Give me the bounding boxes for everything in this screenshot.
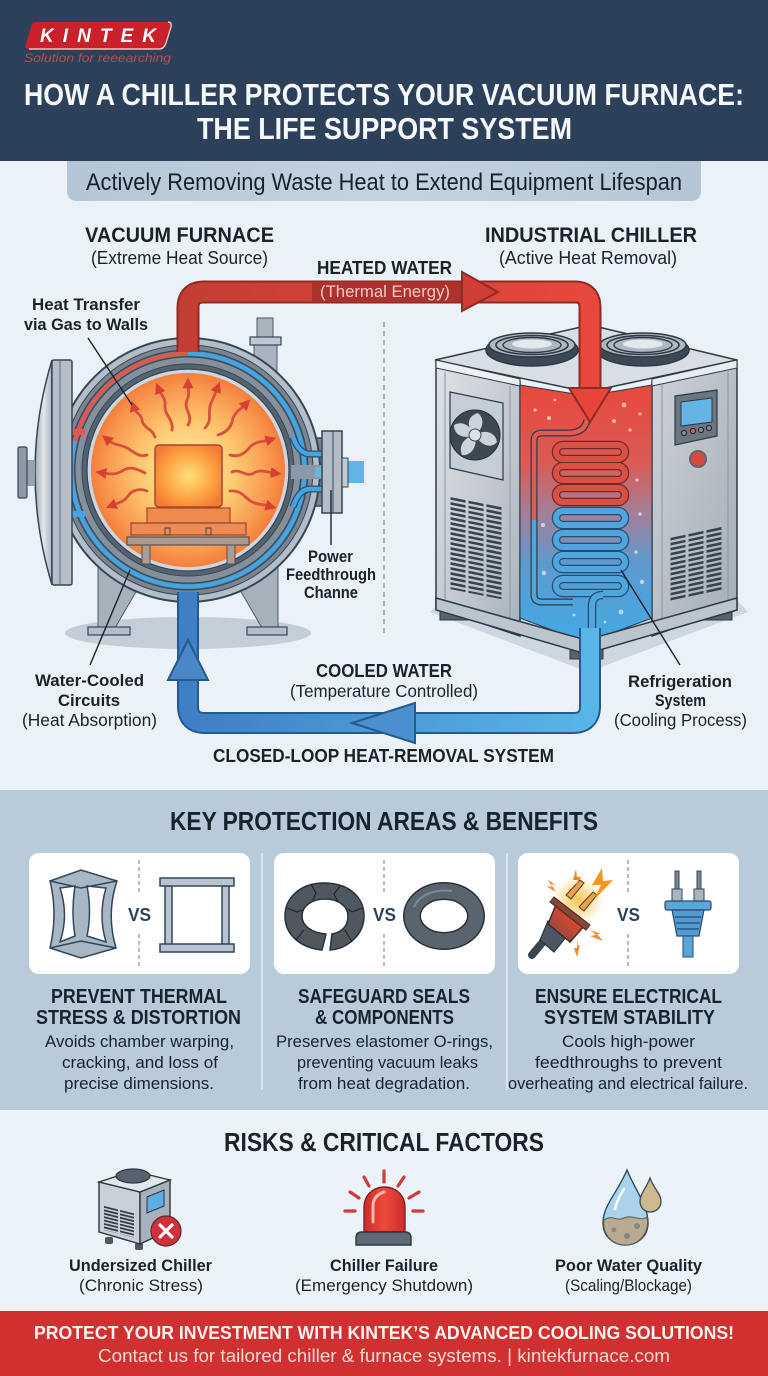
card text: thermal stress: cracking, and loss of bbox=[62, 1053, 218, 1072]
callout: water-cooled circuits: (Heat Absorption) bbox=[22, 710, 157, 730]
icon: burnt plug bbox=[532, 868, 613, 957]
risk: poor water quality bbox=[555, 1170, 703, 1295]
door flange bbox=[52, 360, 72, 585]
risk: undersized chiller: (Chronic Stress) bbox=[79, 1276, 203, 1295]
risk: chiller failure: (Emergency Shutdown) bbox=[295, 1276, 473, 1295]
center dashed divider bbox=[383, 322, 385, 637]
callout: heat transfer: via Gas to Walls bbox=[24, 315, 148, 334]
thermal energy label: (Thermal Energy) bbox=[320, 282, 450, 301]
furnace floor shadow bbox=[65, 617, 311, 649]
risks heading: RISKS & CRITICAL FACTORS bbox=[224, 1129, 544, 1157]
cooled water label: (Temperature Controlled) bbox=[290, 681, 478, 701]
risk: chiller failure bbox=[295, 1171, 473, 1295]
callout: power feedthrough: Power bbox=[308, 547, 353, 566]
card text: seals: from heat degradation. bbox=[298, 1074, 470, 1093]
icon: small chiller with X bbox=[99, 1169, 181, 1250]
door bbox=[18, 360, 52, 585]
icon: healthy plug bbox=[665, 871, 711, 957]
card text: electrical: Cools high-power bbox=[562, 1032, 695, 1051]
right port channels and flange bbox=[291, 431, 364, 513]
footer call to action: PROTECT YOUR INVESTMENT WITH KINTEK’S ADVANCED COOLING SOLUTIONS! bbox=[34, 1322, 734, 1343]
pipe from furnace to chiller bbox=[188, 292, 590, 390]
arrowhead into chiller bbox=[569, 388, 611, 422]
card text: thermal stress: Avoids chamber warping, bbox=[45, 1032, 234, 1051]
callout: water-cooled circuits: Water-Cooled bbox=[35, 671, 144, 690]
cooled water label bbox=[290, 661, 478, 701]
cooled water label: COOLED WATER bbox=[316, 661, 452, 681]
callout: refrigeration system: Refrigeration bbox=[628, 672, 732, 691]
callout: refrigeration system bbox=[614, 570, 747, 730]
icon: cabinet fan bbox=[450, 392, 503, 480]
chiller heading: INDUSTRIAL CHILLER bbox=[485, 223, 697, 247]
loop: cooled water pipe and arrows bbox=[168, 592, 590, 743]
chiller feet bbox=[440, 606, 732, 659]
left cabinet panel bbox=[436, 360, 520, 636]
right cabinet panel bbox=[652, 360, 737, 636]
risk: poor water quality: (Scaling/Blockage) bbox=[565, 1276, 692, 1295]
title bbox=[24, 78, 744, 146]
logo: KINTEK: Solution for reeearching bbox=[24, 53, 172, 65]
card text: thermal stress: STRESS & DISTORTION bbox=[36, 1007, 241, 1029]
heated load and stand bbox=[127, 445, 249, 564]
icon: cracked o-ring bbox=[285, 883, 364, 950]
chiller floor shadow bbox=[430, 598, 748, 672]
card text: thermal stress: precise dimensions. bbox=[64, 1074, 214, 1093]
logo: KINTEK: KINTEK bbox=[40, 26, 157, 47]
arrowhead up into furnace bbox=[168, 640, 208, 680]
card: thermal stress bbox=[29, 853, 250, 974]
right side nozzle body bbox=[285, 400, 326, 540]
chiller heading bbox=[485, 223, 697, 268]
label: chiller failure: Chiller Failure bbox=[330, 1256, 438, 1275]
subtitle banner bbox=[67, 161, 701, 201]
panel: risks and critical factors bbox=[0, 1110, 768, 1311]
card text: thermal stress: PREVENT THERMAL bbox=[51, 986, 227, 1008]
loop: heated water pipe and arrows bbox=[188, 258, 611, 422]
label: undersized chiller: Undersized Chiller bbox=[69, 1256, 212, 1275]
callout: power feedthrough: Feedthrough bbox=[286, 565, 376, 584]
callout: water-cooled circuits: Circuits bbox=[58, 691, 120, 710]
card text: seals: & COMPONENTS bbox=[315, 1007, 454, 1029]
heat waves bbox=[103, 385, 274, 506]
callout: heat transfer: Heat Transfer bbox=[32, 295, 140, 314]
refrigeration coil bbox=[534, 420, 625, 640]
control display bbox=[675, 390, 717, 467]
vacuum furnace illustration bbox=[18, 318, 364, 649]
callout: power feedthrough: Channe bbox=[304, 583, 358, 602]
card text: electrical: ENSURE ELECTRICAL bbox=[535, 986, 722, 1008]
risk: undersized chiller bbox=[69, 1169, 212, 1295]
card text: thermal stress bbox=[36, 986, 241, 1093]
header banner bbox=[0, 0, 768, 161]
icon: warped frame bbox=[50, 870, 117, 958]
icon: alarm siren bbox=[345, 1171, 423, 1245]
card text: seals: SAFEGUARD SEALS bbox=[298, 986, 470, 1008]
card text: electrical: overheating and electrical failure. bbox=[508, 1074, 748, 1093]
heated water label: HEATED WATER bbox=[317, 258, 452, 278]
card: thermal stress: VS bbox=[128, 905, 151, 925]
chiller heading: (Active Heat Removal) bbox=[499, 248, 677, 268]
label: poor water quality: Poor Water Quality bbox=[555, 1256, 703, 1275]
callout: power feedthrough bbox=[286, 490, 376, 602]
closed-loop caption: CLOSED-LOOP HEAT-REMOVAL SYSTEM bbox=[213, 746, 554, 766]
furnace heading: (Extreme Heat Source) bbox=[91, 248, 268, 268]
card text: seals: Preserves elastomer O-rings, bbox=[276, 1032, 493, 1051]
icon: intact o-ring bbox=[412, 891, 476, 941]
footer call to action bbox=[0, 1311, 768, 1376]
callout: refrigeration system: System bbox=[655, 691, 706, 710]
coolant bubbles bbox=[533, 399, 644, 623]
arrowhead left along pipe bbox=[352, 703, 415, 743]
card: seals: VS bbox=[373, 905, 396, 925]
left louvers bbox=[458, 499, 494, 598]
arrowhead into horizontal run bbox=[462, 272, 498, 311]
card text: electrical: feedthroughs to prevent bbox=[535, 1053, 722, 1072]
glowing hot zone bbox=[91, 373, 285, 567]
furnace legs bbox=[88, 560, 287, 635]
card: electrical: VS bbox=[617, 905, 640, 925]
title: THE LIFE SUPPORT SYSTEM bbox=[197, 112, 572, 146]
logo: KINTEK bbox=[24, 22, 172, 65]
chiller base frame bbox=[436, 598, 737, 654]
industrial chiller illustration bbox=[430, 325, 748, 672]
card text: electrical bbox=[508, 986, 748, 1093]
furnace heading: VACUUM FURNACE bbox=[85, 223, 274, 247]
open refrigeration compartment bbox=[520, 385, 652, 643]
icon: contaminated water drops bbox=[603, 1170, 661, 1245]
top surface and fans bbox=[435, 325, 737, 392]
panel: key protection areas bbox=[0, 790, 768, 1110]
card: electrical bbox=[518, 853, 739, 974]
card: seals bbox=[274, 853, 495, 974]
footer call to action: Contact us for tailored chiller & furnace systems. | kintekfurnace.com bbox=[98, 1346, 670, 1366]
card text: seals bbox=[276, 986, 493, 1093]
furnace heading bbox=[85, 223, 274, 268]
icon: straight frame bbox=[160, 878, 234, 952]
callout: heat transfer bbox=[24, 295, 148, 405]
callout: refrigeration system: (Cooling Process) bbox=[614, 710, 747, 730]
pipe from chiller to furnace bbox=[188, 592, 590, 723]
chamber shell with cooling channels bbox=[56, 338, 320, 602]
right louvers bbox=[678, 529, 714, 600]
card text: seals: preventing vacuum leaks bbox=[297, 1053, 478, 1072]
callout: water-cooled circuits bbox=[22, 570, 157, 730]
top port bbox=[250, 318, 281, 389]
section heading: KEY PROTECTION AREAS & BENEFITS bbox=[170, 808, 598, 836]
subtitle banner: Actively Removing Waste Heat to Extend Equipment Lifespan bbox=[86, 169, 682, 196]
card text: electrical: SYSTEM STABILITY bbox=[544, 1007, 716, 1029]
